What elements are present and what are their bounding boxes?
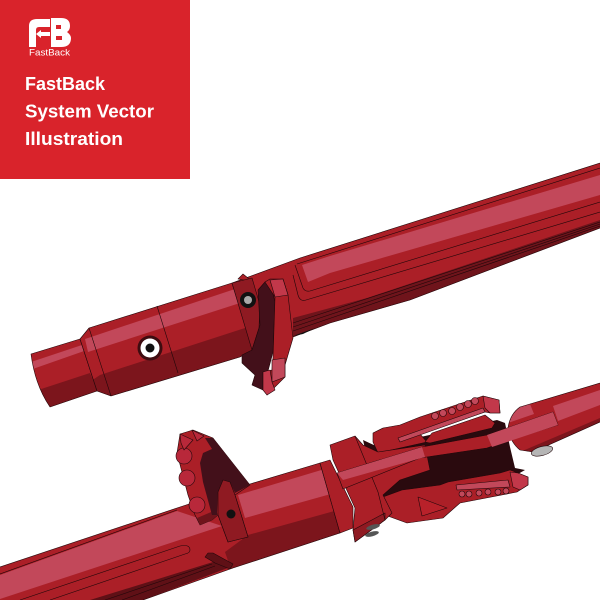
shoulder and barrel [80, 282, 252, 396]
title text [25, 74, 154, 149]
right tube [508, 382, 600, 452]
lower bit wing [380, 470, 528, 523]
upper bit wing [373, 396, 500, 453]
icon: FastBack logo [29, 18, 71, 58]
title text: Illustration [25, 129, 123, 149]
collar with bolt [232, 274, 260, 350]
title text: FastBack [25, 74, 106, 94]
main collar [330, 436, 430, 542]
central arm [337, 412, 558, 489]
long upper tube [232, 163, 600, 350]
dark cavity [363, 420, 525, 500]
lower tool assembly [0, 383, 600, 600]
upper blade [242, 279, 293, 395]
blade cutter knobs [176, 430, 205, 513]
panel: title block [0, 0, 190, 179]
lower tube [0, 463, 350, 600]
icon: ring port [138, 336, 162, 360]
lower-left blade [177, 430, 250, 542]
icon: side screw [530, 444, 554, 458]
title text: System Vector [25, 102, 154, 122]
nose section [30, 338, 98, 408]
icon: FastBack logo: FastBack [29, 48, 70, 58]
upper tool assembly [20, 163, 600, 430]
bit neck [320, 460, 353, 533]
